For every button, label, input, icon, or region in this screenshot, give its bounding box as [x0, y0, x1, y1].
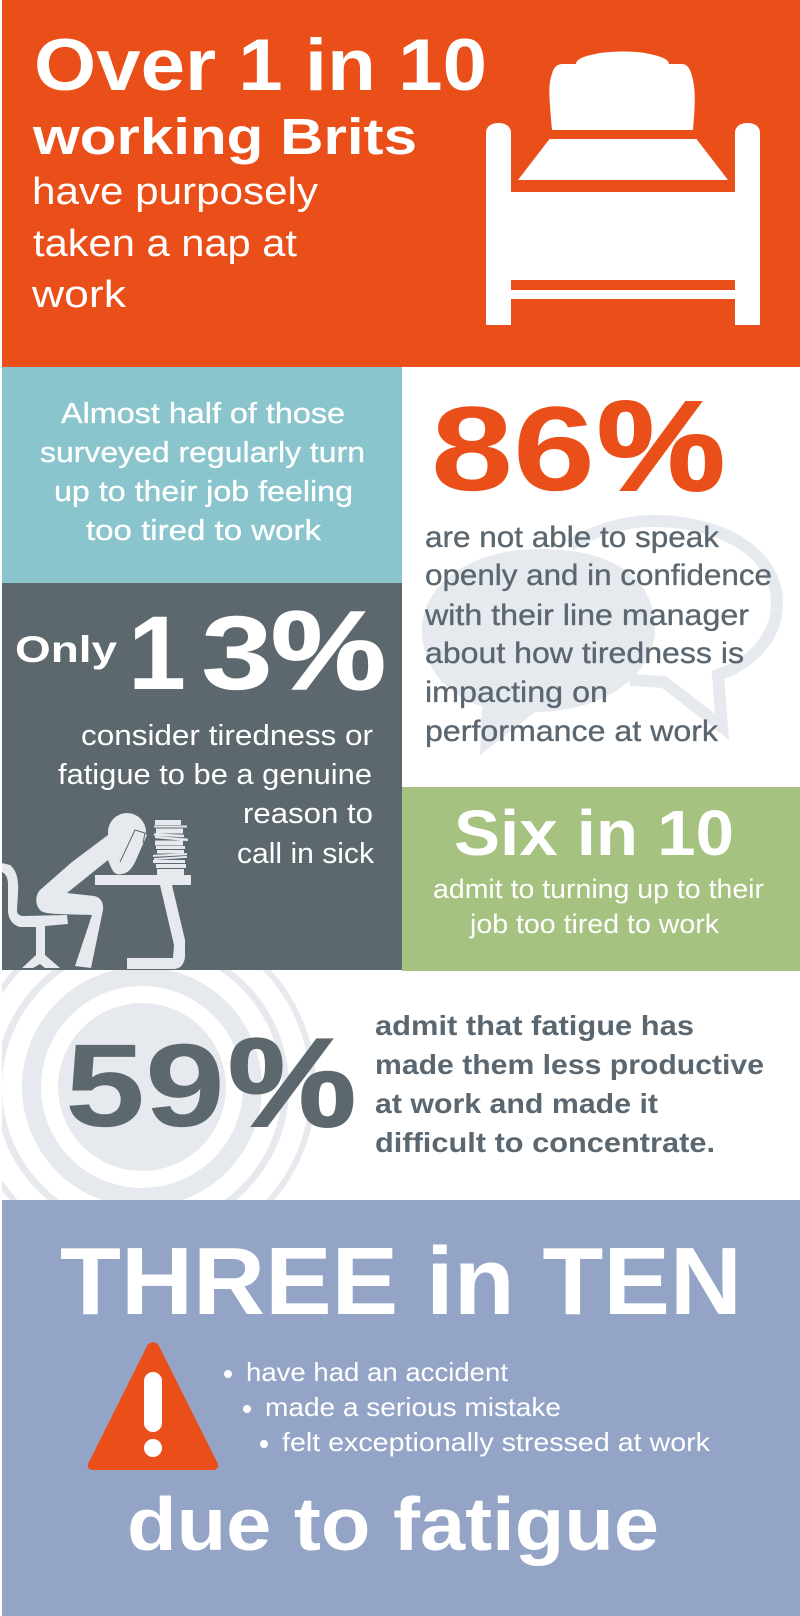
stat: 59%: 59: [65, 1020, 225, 1152]
text: admit that fatigue: [375, 1010, 764, 1158]
icon: speech bubbles: [422, 521, 777, 755]
text: admit that fatigue: at work and made it: [375, 1088, 658, 1119]
stat: 13%: %: [271, 588, 386, 713]
heading: Six in 10: Six in 10: [454, 797, 734, 869]
panel: six in 10: [402, 787, 800, 971]
text: have purposely taken a nap at work: taken a nap at: [33, 223, 297, 265]
forearm outline: [120, 830, 145, 862]
text: almost half of those surveyed: surveyed regularly turn: [40, 437, 365, 469]
text: almost half of those surveyed: Almost half of those: [61, 398, 345, 430]
icon: warning triangle: [88, 1342, 218, 1470]
text: not able to speak openly: are not able to speak: [425, 521, 720, 554]
books: [153, 820, 188, 875]
icon: tired worker at desk: [2, 813, 191, 969]
text: not able to speak openly: about how tiredness is: [425, 637, 744, 670]
panel: 59 percent: [2, 970, 763, 1200]
icon: concentric circles: [2, 970, 316, 1200]
text: admit to turning up: job too tired to work: [469, 909, 720, 939]
heading: THREE in TEN: THREE in TEN: [60, 1228, 742, 1335]
heading: working Brits: working Brits: [32, 108, 417, 165]
text: almost half of those surveyed: too tired to work: [86, 515, 322, 547]
text: consider tiredness: [58, 720, 375, 870]
text: not able to speak openly: impacting on: [425, 676, 608, 709]
chair: [2, 863, 68, 968]
text: almost half of those surveyed: up to their job feeling: [54, 476, 353, 508]
stat: 13%: 1: [128, 595, 186, 712]
text: consider tiredness: reason to: [243, 798, 373, 830]
stat: 86%: 86: [431, 382, 595, 516]
text: admit to turning up: [433, 874, 764, 939]
panel: three in ten: [2, 1200, 800, 1616]
stat: 13%: 3: [201, 595, 273, 712]
heading: Over 1 in 10: Over 1 in 10: [34, 25, 487, 106]
list: fatigue consequences: have had an accident: [246, 1357, 509, 1387]
panel: 86 percent: [402, 367, 800, 787]
text: consider tiredness: call in sick: [237, 838, 375, 870]
panel: only 13 percent: [2, 583, 402, 970]
stat: 86%: %: [597, 375, 725, 518]
text: admit to turning up: admit to turning up to their: [433, 874, 764, 904]
text: almost half of those surveyed: [40, 398, 365, 547]
text: not able to speak openly: performance at work: [425, 715, 719, 748]
list: fatigue consequences: felt exceptionally stressed at work: [282, 1427, 711, 1457]
stat: 59%: %: [228, 1012, 356, 1153]
text: admit that fatigue: difficult to concentrate.: [375, 1127, 715, 1158]
heading: due to fatigue: due to fatigue: [127, 1482, 659, 1566]
person: [36, 830, 147, 968]
stat: 59%: [65, 1012, 356, 1153]
panel: nap headline: [2, 0, 800, 367]
text: not able to speak openly: with their line manager: [424, 599, 749, 632]
text: consider tiredness: fatigue to be a genuine: [58, 759, 372, 791]
text: have purposely taken a nap at work: have purposely: [32, 171, 318, 213]
list: fatigue consequences: [224, 1357, 711, 1457]
stat: 86%: [431, 375, 725, 518]
list: fatigue consequences: made a serious mistake: [265, 1392, 561, 1422]
text: admit that fatigue: made them less productive: [375, 1049, 764, 1080]
icon: bed: [486, 52, 760, 325]
text: not able to speak openly: [424, 521, 772, 748]
head: [108, 813, 146, 851]
text: have purposely taken a nap at work: work: [31, 274, 127, 316]
stat: 13%: [128, 588, 386, 713]
text: admit that fatigue: admit that fatigue has: [375, 1010, 694, 1041]
panel: almost half: [2, 367, 402, 583]
desk: [95, 875, 191, 969]
text: have purposely taken a nap at work: [31, 171, 318, 316]
heading: Only: Only: [15, 629, 118, 670]
text: consider tiredness: consider tiredness or: [81, 720, 373, 752]
text: not able to speak openly: openly and in confidence: [425, 559, 772, 592]
